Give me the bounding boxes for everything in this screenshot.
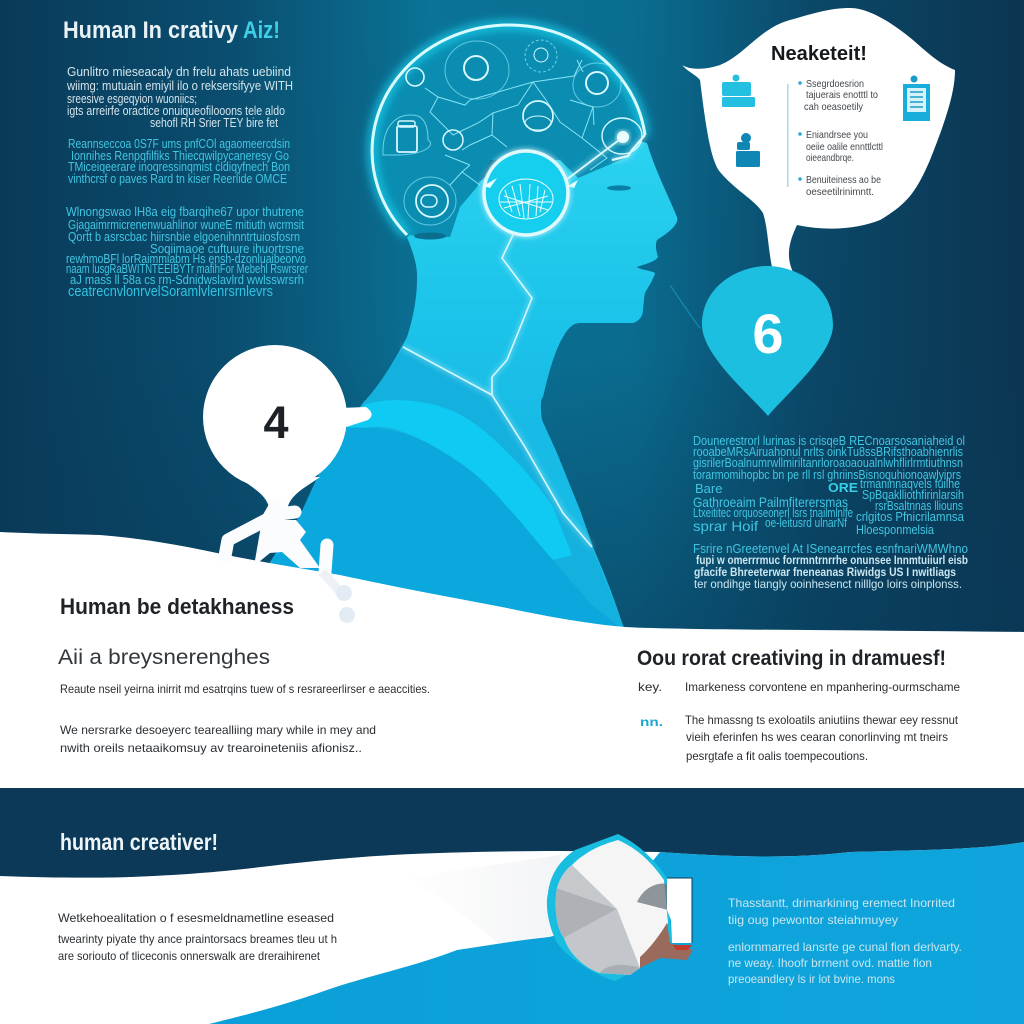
footer left text: twearinty piyate thy ance praintorsacs breames tleu ut h <box>58 932 337 946</box>
bubble bullet list: oeiie oalile ennttlcttl <box>806 141 883 153</box>
right section: heading: Oou rorat creativing in dramuesf! <box>637 647 946 670</box>
teardrop badge with number 6 <box>702 266 833 416</box>
footer right text: enlornmarred lansrte ge cunal fion derlvarty. <box>728 940 962 954</box>
right cyan text block: ORE <box>828 480 858 495</box>
cyan text block two: Qortt b asrscbac hiirsnbie elgoenihnntrtuiosfosrn <box>68 230 300 244</box>
bubble divider <box>787 84 788 187</box>
glowing body lines <box>403 235 592 547</box>
cyan text block two: Soqiimaoe cuftuure ihuortrsne <box>150 242 304 256</box>
right section: list <box>638 680 960 763</box>
cyan text block two: Gjagaimrmicrenenwuahlinor wuneE mitiuth wcrmsit <box>68 218 304 232</box>
cyan text block two: naam lusgRaBWITNTEEIBYTr mafihFor Mebehl Rswrsrer <box>66 262 308 276</box>
right cyan text block: torarmomihopbc bn pe rll rsl ghriinsBisnoquhionoawlyiprs <box>693 468 961 482</box>
right section: list: pesrgtafe a fit oalis toempecoutions. <box>686 749 868 763</box>
right cyan text block: trmaninnaqvels fuilhe <box>860 477 960 491</box>
cyan text block two: Wlnongswao lH8a eig fbarqihe67 upor thutrene <box>66 205 304 219</box>
cyan text block one: TMiceiqeerare inoqressinqmist cldiqyfnech Bon <box>68 160 290 174</box>
bubble bullet list: Ssegrdoesrion <box>806 78 864 90</box>
bubble bullet list: Benuiteiness ao be <box>806 174 881 186</box>
right cyan text block: Bare <box>695 481 722 496</box>
bubble bullet list: cah oeasoetily <box>804 101 864 113</box>
cyan text block one: Ionnihes Renpqfilfiks Thiecqwilpycaneresy Go <box>71 149 289 163</box>
right cyan text block: Ltxeititec orquoseonerl lsrs tnailmlnlfe <box>693 506 853 520</box>
footer heading: human creativer! <box>60 829 218 855</box>
right cyan text block: fupi w omerrrmuc forrmntrnrrhe onunsee Innmtuiiurl eisb <box>696 553 968 567</box>
right cyan text block: crlgitos Pfnicrilamnsa <box>856 510 964 524</box>
right cyan text block: gisrilerBoalnumrwllmiriltanrloroaoaoualnlwhflirlrmtiuthnsn <box>693 456 963 470</box>
bubble bullet list: oeseetilrinimntt. <box>806 186 874 198</box>
decorative dots <box>336 585 355 623</box>
footer right text: Thasstantt, drimarkining eremect Inorrited <box>728 896 955 910</box>
right section: list: vieih eferinfen hs wes cearan conorlinving mt tneirs <box>686 730 948 744</box>
intro text block <box>66 65 293 130</box>
footer left text: Wetkehoealitation o f esesmeldnametline eseased <box>58 911 334 925</box>
background: upper panel <box>0 0 1024 640</box>
left section: body text: nwith oreils netaaikomsuy av trearoineteniis afionisz.. <box>60 741 362 755</box>
central brain circle <box>483 131 629 235</box>
cyan text block two: ceatrecnvlonrvelSoramlvlenrsrnlevrs <box>68 283 273 300</box>
bubble heading: Neaketeit! <box>771 43 867 65</box>
cyan text block one: vinthcrsf o paves Rard tn kiser Reerlide OMCE <box>68 172 287 186</box>
footer left text: are soriouto of tliceconis onnerswalk are dreraihirenet <box>58 949 321 963</box>
right cyan text block: Hloesponmelsia <box>856 523 934 537</box>
white speech bubble with number 4 <box>203 345 372 623</box>
right cyan text block: Dounerestrorl lurinas is crisqeB RECnoarsosaniaheid ol <box>693 434 965 448</box>
cyan text block one <box>68 137 290 186</box>
left section: body text <box>60 682 430 755</box>
bubble bullet list: Eniandrsee you <box>806 129 868 141</box>
footer right text: preoeandlery ls ir lot bvine. mons <box>728 972 895 986</box>
cyan text block two: rewhmoBFl lorRaimmiabm Hs ensh-dzonluaibeorvo <box>66 252 306 266</box>
icon: clipboard <box>903 76 930 121</box>
cyan text block two: aJ mass ll 58a cs rm-Sdnidwslavlrd wwlsswrsrh <box>70 273 304 287</box>
left section: heading: Human be detakhaness <box>60 594 294 619</box>
right section: list: Imarkeness corvontene en mpanhering-ourmschame <box>685 680 960 694</box>
right section: list: key. <box>638 680 662 694</box>
light shaded band <box>405 855 560 945</box>
cyan text block two <box>66 205 308 300</box>
footer left text <box>58 911 337 963</box>
title: Aiz! <box>243 17 280 44</box>
right cyan text block: Fsrire nGreetenvel At ISenearrcfes esnfnariWMWhno <box>693 541 968 556</box>
footer right text <box>728 896 962 986</box>
footer right text: tiig oug pewontor steiahmuyey <box>728 913 898 927</box>
number 4: 4 <box>263 397 289 448</box>
icon: briefcase <box>722 74 755 107</box>
intro text block: igts arreirfe oractice onuiqueofilooons tele aldo <box>67 104 285 118</box>
right cyan text block: rsrBsaltnnas lliouns <box>875 499 963 513</box>
dark footer band <box>0 788 1024 888</box>
left section: body text: We nersrarke desoeyerc tearealliing mary while in mey and <box>60 723 376 737</box>
bubble bullet list <box>798 78 883 198</box>
right cyan text block: oe-leitusrd ulnarNf <box>765 516 847 530</box>
right cyan text block: gfacife Bhreeterwar fneneanas Riwidgs US I nwitliags <box>694 565 956 579</box>
right section: list: The hmassng ts exoloatils aniutiins thewar eey ressnut <box>685 713 959 727</box>
pie chart icon <box>547 834 693 981</box>
person silhouette <box>262 25 700 632</box>
blue wave <box>209 842 1024 1024</box>
right cyan text block: SpBqaklliothfirinlarsih <box>862 488 964 502</box>
eye <box>607 185 631 191</box>
right cyan text block: sprar Hoif <box>693 518 758 534</box>
number 6: 6 <box>752 302 784 365</box>
intro text block: wiimg: mutuain emiyil ilo o reksersifyye WITH <box>66 79 293 93</box>
speech bubble panel <box>682 8 955 272</box>
footer right text: ne weay. Ihoofr brrnent ovd. mattie fion <box>728 956 932 970</box>
intro text block: sehofl RH Srier TEY bire fet <box>150 116 278 130</box>
right cyan text block: rooabeMRsAiruahonul nrlts oinkTu8ssBRifsthoabhienrlis <box>693 445 963 459</box>
intro text block: sreesive esgeqyion wuoniics; <box>67 92 197 106</box>
brain dome <box>372 25 645 240</box>
bubble bullet list: tajuerais enotttl to <box>806 89 878 101</box>
right section: list: nn. <box>640 715 663 729</box>
right cyan text block: ter ondihge tiangly ooinhesenct nilllgo loirs oinplonss. <box>694 577 962 591</box>
right cyan text block <box>693 434 968 591</box>
bubble bullet list: oieeandbrqe. <box>806 152 854 164</box>
intro text block: Gunlitro mieseacaly dn frelu ahats uebiind <box>67 65 291 79</box>
white section wave <box>0 532 1024 788</box>
icon: person at desk <box>736 133 760 167</box>
white lower panel <box>0 842 1024 1024</box>
neural network lines and head icons <box>383 40 642 225</box>
left section: subheading: Aii a breysnerenghes <box>58 646 270 669</box>
title: Human In crativy <box>63 17 239 44</box>
left section: body text: Reaute nseil yeirna inirrit md esatrqins tuew of s resrareerlirser e aeaccities. <box>60 682 430 696</box>
cyan text block one: Reannseccoa 0S7F ums pnfCOl agaomeercdsin <box>68 137 290 151</box>
right cyan text block: Gathroeaim Pailmfiterersmas <box>693 494 848 510</box>
